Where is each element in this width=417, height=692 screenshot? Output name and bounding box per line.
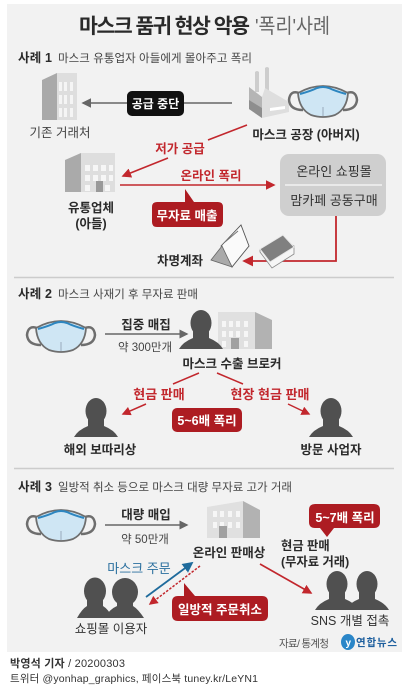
label: mask factory: 마스크 공장 (아버지) bbox=[252, 128, 360, 142]
credit: reporter: 박영석 기자 / 20200303 bbox=[10, 656, 125, 670]
callout: one-sided cancellation: 일방적 주문취소 bbox=[178, 602, 262, 617]
badge: supply halted bbox=[127, 91, 184, 116]
callout: unreported sales bbox=[152, 189, 223, 227]
label: mask export broker: 마스크 수출 브로커 bbox=[183, 357, 281, 371]
callout: 5-7x profit bbox=[309, 504, 380, 537]
title bbox=[79, 15, 330, 38]
callout: 5-7x profit: 5~7배 폭리 bbox=[315, 511, 375, 525]
label: about 500,000: 약 50만개 bbox=[121, 532, 169, 546]
arrow: to borrowed-name account bbox=[244, 216, 336, 261]
label: bulk purchase: 대량 매입 bbox=[121, 507, 171, 522]
panel: case 2 bbox=[18, 286, 362, 457]
panel: case 1: (아들) bbox=[75, 217, 107, 231]
icon: mask bbox=[27, 510, 95, 541]
panel: online shopping mall: 온라인 쇼핑몰 bbox=[296, 164, 372, 179]
label: SNS contacts: SNS 개별 접촉 bbox=[311, 614, 389, 628]
logo: Yonhap News: y bbox=[346, 638, 352, 649]
label: cash sale, no-invoice: (무자료 거래) bbox=[281, 554, 349, 569]
callout: unreported sales: 무자료 매출 bbox=[157, 208, 217, 223]
source: 자료/ 통계청 bbox=[279, 638, 329, 650]
arrow: on-site cash sale bbox=[217, 373, 309, 414]
label: low-price supply: 저가 공급 bbox=[155, 141, 205, 156]
heading: case 2 bbox=[18, 286, 198, 301]
badge: supply halted: 공급 중단 bbox=[132, 97, 179, 111]
icon: distributor building bbox=[65, 153, 115, 192]
arrow: supply halted bbox=[83, 102, 232, 104]
icon: bankbook bbox=[211, 225, 249, 267]
label: existing client: 기존 거래처 bbox=[30, 126, 90, 140]
arrow: one-sided cancellation bbox=[150, 566, 200, 604]
icon: mask bbox=[27, 321, 95, 352]
icon: mask bbox=[289, 86, 357, 117]
icon: cash bbox=[260, 235, 294, 268]
label: borrowed-name account: 차명계좌 bbox=[157, 254, 203, 268]
title: 마스크 품귀 현상 악용 bbox=[79, 15, 250, 38]
heading: case 1 bbox=[18, 50, 252, 65]
label: cash sale: 현금 판매 bbox=[133, 387, 185, 402]
icon: mall users bbox=[77, 578, 144, 618]
heading: case 2: 사례 2 bbox=[18, 286, 52, 301]
label: bulk buying: 집중 매집 bbox=[121, 317, 171, 332]
label: mall users: 쇼핑몰 이용자 bbox=[75, 622, 148, 636]
icon: existing client building bbox=[42, 73, 77, 120]
arrow: low-price supply bbox=[123, 125, 247, 176]
arrow: cash sale to SNS bbox=[260, 564, 311, 593]
heading: case 3: 사례 3 bbox=[18, 479, 52, 494]
heading: case 1: 마스크 유통업자 아들에게 몰아주고 폭리 bbox=[58, 52, 252, 65]
icon: online seller building bbox=[207, 501, 260, 538]
label: cash sale, no-invoice: 현금 판매 bbox=[281, 538, 330, 553]
label: cash sale, no-invoice bbox=[281, 538, 349, 569]
heading: case 1: 사례 1 bbox=[18, 50, 52, 65]
label: online profiteering: 온라인 폭리 bbox=[181, 169, 241, 183]
label: online seller: 온라인 판매상 bbox=[193, 545, 266, 560]
badge: 5-6x profit: 5~6배 폭리 bbox=[177, 414, 237, 428]
arrow: online profiteering bbox=[120, 184, 274, 186]
icon: broker bbox=[179, 310, 223, 349]
label: mask order: 마스크 주문 bbox=[107, 561, 171, 576]
arrow: mask order bbox=[146, 563, 192, 597]
icon: factory bbox=[249, 67, 289, 118]
panel: case 1 bbox=[18, 50, 386, 268]
heading: case 3: 일방적 취소 등으로 마스크 대량 무자료 고가 거래 bbox=[58, 480, 292, 494]
logo: Yonhap News bbox=[341, 634, 397, 650]
logo: Yonhap News: 연합뉴스 bbox=[356, 636, 397, 649]
label: about 3 million: 약 300만개 bbox=[118, 340, 172, 354]
icon: visiting trader bbox=[309, 398, 353, 437]
badge: 5-6x profit bbox=[172, 408, 242, 432]
label: overseas peddler: 해외 보따리상 bbox=[64, 442, 137, 457]
arrow: bulk purchase bbox=[105, 524, 187, 526]
panel: online shopping mall bbox=[280, 154, 386, 216]
panel: online shopping mall: 맘카페 공동구매 bbox=[290, 193, 378, 208]
label: distributor: 유통업체 bbox=[68, 201, 114, 215]
credit: social: 트위터 @yonhap_graphics, 페이스북 tuney.kr/LeYN1 bbox=[10, 672, 258, 685]
arrow: cash sale bbox=[123, 373, 199, 414]
icon: overseas peddler bbox=[74, 398, 118, 437]
icon: broker building bbox=[218, 312, 272, 349]
title: '폭리'사례 bbox=[255, 15, 330, 38]
icon: SNS contacts bbox=[315, 571, 389, 610]
callout: one-sided cancellation bbox=[172, 583, 268, 621]
panel: case 3 bbox=[18, 479, 397, 650]
heading: case 3 bbox=[18, 479, 292, 494]
label: on-site cash sale: 현장 현금 판매 bbox=[231, 387, 309, 402]
label: visiting trader: 방문 사업자 bbox=[301, 443, 362, 457]
heading: case 2: 마스크 사재기 후 무자료 판매 bbox=[58, 288, 198, 301]
arrow: bulk buying bbox=[105, 333, 187, 335]
